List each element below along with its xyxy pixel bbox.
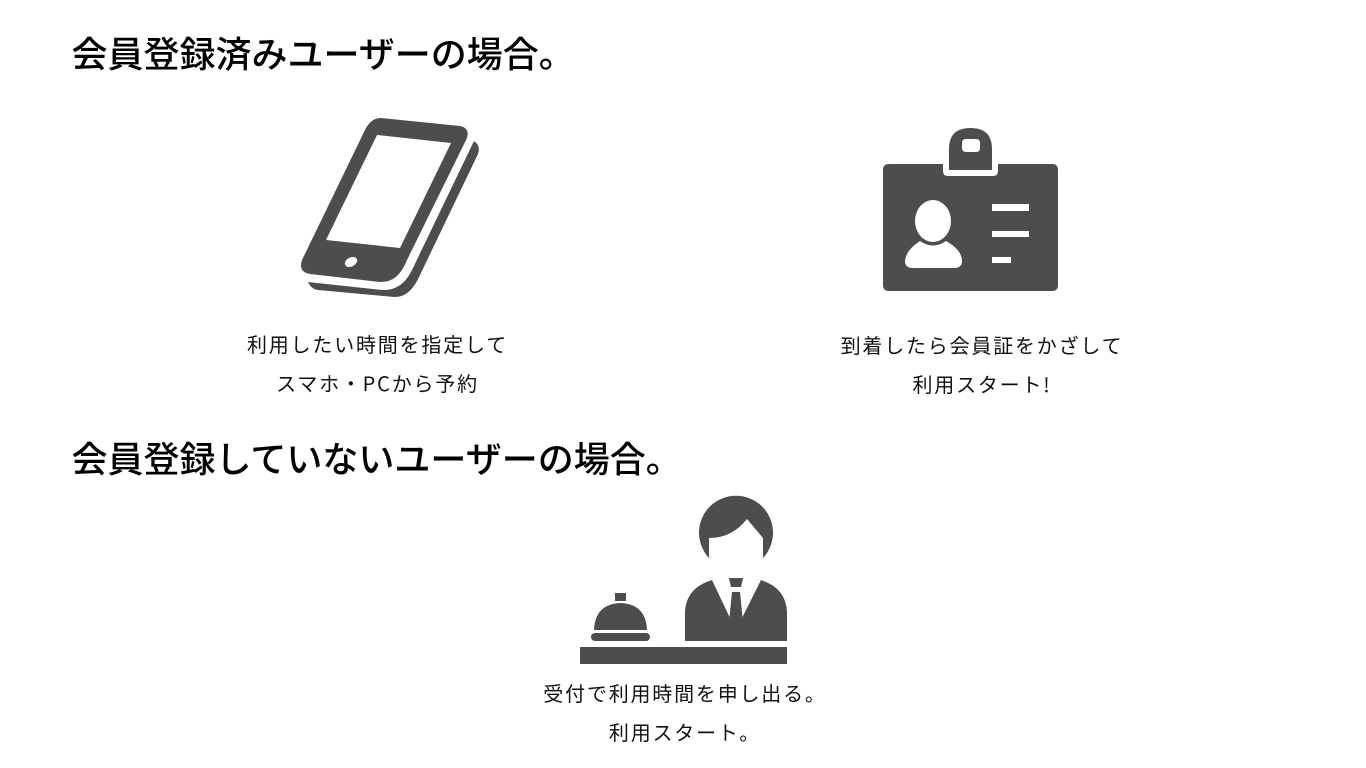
text: smartphone caption — [247, 329, 508, 396]
icon: member ID card — [883, 128, 1058, 291]
icon: receptionist at desk with bell — [580, 496, 787, 664]
text: ID card caption: 利用スタート! — [912, 368, 1052, 398]
text: reception caption — [543, 678, 827, 746]
heading: registered users: 会員登録済みユーザーの場合。 — [72, 26, 575, 78]
text: reception caption: 受付で利用時間を申し出る。 — [543, 678, 827, 707]
text: ID card caption: 到着したら会員証をかざして — [841, 330, 1123, 359]
text: smartphone caption: 利用したい時間を指定して — [247, 329, 508, 358]
icon: smartphone — [301, 118, 479, 297]
text: ID card caption — [841, 330, 1123, 398]
text: smartphone caption: スマホ・PCから予約 — [276, 368, 479, 396]
heading: non-registered users: 会員登録していないユーザーの場合。 — [72, 431, 682, 483]
text: reception caption: 利用スタート。 — [609, 716, 761, 746]
